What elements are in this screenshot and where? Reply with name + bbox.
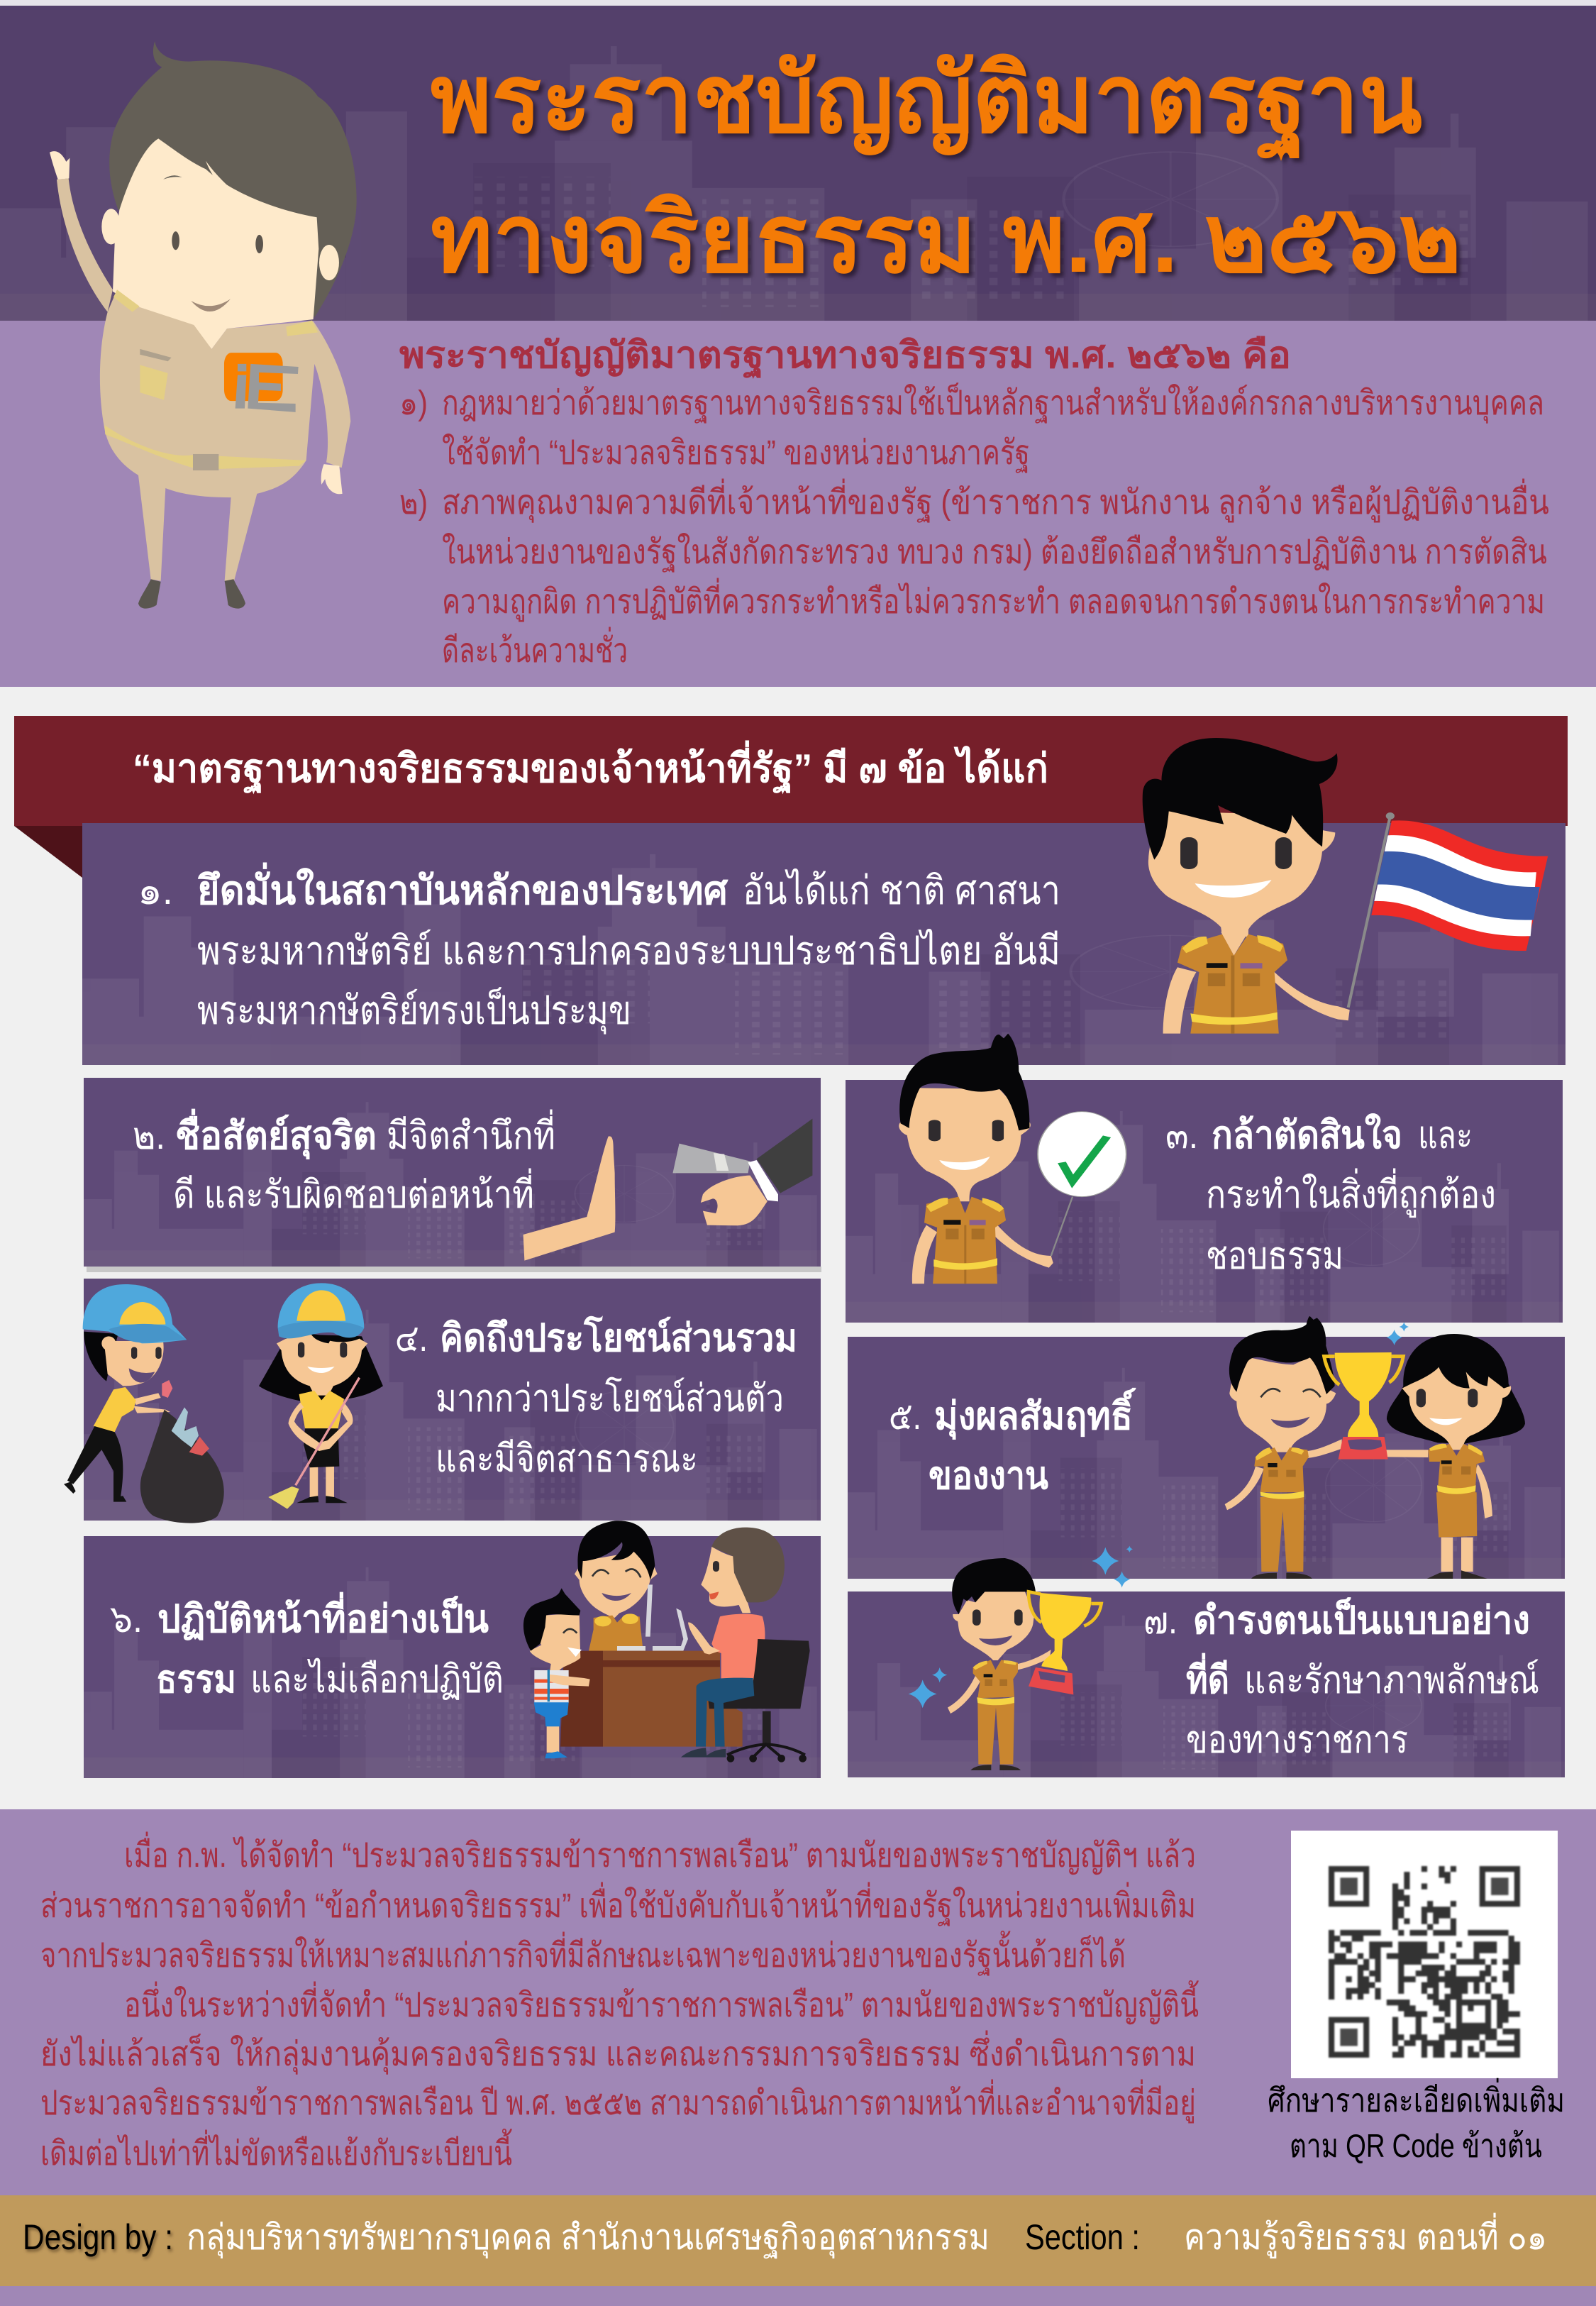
item one: ๑) (399, 385, 428, 422)
panel 2 (84, 1078, 821, 1272)
panel 7 text: ของทางราชการ (1186, 1719, 1408, 1761)
panel 4 text: มากกว่าประโยชน์ส่วนตัว (436, 1377, 784, 1420)
panel 5 text: มุ่งผลสัมฤทธิ์ (934, 1387, 1136, 1440)
item one (399, 382, 1544, 473)
note text block: ยังไม่แล้วเสร็จ ให้กลุ่มงานคุ้มครองจริยธรรม และคณะกรรมการจริยธรรม ซึ่งดำเนินการตาม (40, 2030, 1196, 2075)
panel 6 text (110, 1591, 504, 1701)
panel 5 text: ๕. (889, 1395, 921, 1438)
QR caption: ตาม QR Code ข้างต้น (1290, 2127, 1542, 2164)
panel 1 text: อันได้แก่ ชาติ ศาสนา (743, 868, 1060, 912)
QR code (1291, 1831, 1558, 2078)
note text block: จากประมวลจริยธรรมให้เหมาะสมแก่ภารกิจที่มีลักษณะเฉพาะของหน่วยงานของรัฐนั้นด้วยก็ได้ (40, 1931, 1126, 1975)
panel 7 text: ดำรงตนเป็นแบบอย่าง (1193, 1598, 1530, 1642)
panel 3 text (1165, 1113, 1496, 1277)
item two: ดีละเว้นความชั่ว (442, 627, 628, 670)
illustration: officer serving citizens at desk (523, 1521, 810, 1762)
panel 5 (848, 1316, 1565, 1579)
item two: ๒) (399, 484, 428, 522)
footer bar (0, 2195, 1596, 2286)
panel 6 text: ปฏิบัติหน้าที่อย่างเป็น (157, 1591, 489, 1640)
panel 1 text: พระมหากษัตริย์ทรงเป็นประมุข (197, 986, 631, 1035)
panel 4 text: ๔. (395, 1317, 428, 1359)
panel 3 (846, 1034, 1563, 1323)
intro panel background (0, 321, 1596, 687)
note text block (40, 1831, 1199, 2173)
note text block: ประมวลจริยธรรมข้าราชการพลเรือน ปี พ.ศ. ๒๕๕๒ สามารถดำเนินการตามหน้าที่และอำนาจที่มีอยู่ (40, 2079, 1196, 2124)
title (431, 45, 1461, 292)
item one: ใช้จัดทำ “ประมวลจริยธรรม” ของหน่วยงานภาครัฐ (442, 433, 1030, 473)
panel 2 text: ชื่อสัตย์สุจริต (175, 1108, 377, 1160)
panel 4 text: คิดถึงประโยชน์ส่วนรวม (440, 1315, 797, 1359)
panel 3 text: ๓. (1165, 1114, 1198, 1157)
panel 4 text (395, 1315, 797, 1480)
panel 3 text: กล้าตัดสินใจ (1212, 1113, 1402, 1157)
panel 6 text: และไม่เลือกปฏิบัติ (250, 1657, 504, 1701)
character: two officers holding trophy (1225, 1316, 1525, 1579)
note text block: เมื่อ ก.พ. ได้จัดทำ “ประมวลจริยธรรมข้าราชการพลเรือน” ตามนัยของพระราชบัญญัติฯ แล้ว (124, 1831, 1196, 1875)
character: officer with Thai flag (1143, 738, 1548, 1034)
panel 2 text: ๒. (133, 1115, 165, 1157)
character: woman sweeping (259, 1283, 383, 1509)
panel 3 text: กระทำในสิ่งที่ถูกต้อง (1206, 1168, 1496, 1218)
intro text block (399, 335, 1549, 670)
panel 7 text (1143, 1598, 1539, 1761)
panel 7 text: ที่ดี (1186, 1653, 1229, 1701)
panel 1 text (138, 862, 1060, 1035)
panel 1 text: ยึดมั่นในสถาบันหลักของประเทศ (197, 862, 728, 912)
panel 3 text: ชอบธรรม (1206, 1235, 1343, 1277)
footer text: กลุ่มบริหารทรัพยากรบุคคล สำนักงานเศรษฐกิจอุตสาหกรรม (187, 2217, 990, 2258)
panel 2 text: ดี และรับผิดชอบต่อหน้าที่ (173, 1168, 534, 1216)
panel 6 text: ๖. (110, 1598, 143, 1640)
panel 6 (84, 1521, 821, 1778)
panel 2 text (133, 1108, 555, 1216)
bottom information panel (0, 1809, 1596, 2306)
panel 1 text: พระมหากษัตริย์ และการปกครองระบบประชาธิปไตย อันมี (197, 928, 1060, 973)
note text block: ส่วนราชการอาจจัดทำ “ข้อกำหนดจริยธรรม” เพื่อใช้บังคับกับเจ้าหน้าที่ของรัฐในหน่วยงานเพิ่มเติม (40, 1882, 1196, 1926)
section ribbon (14, 716, 1568, 878)
footer text: Section : (1025, 2217, 1140, 2257)
panel 1 text: ๑. (138, 868, 173, 912)
panel 4 (64, 1279, 821, 1523)
intro heading: พระราชบัญญัติมาตรฐานทางจริยธรรม พ.ศ. ๒๕๖๒ คือ (399, 335, 1291, 379)
panel 7 text: ๗. (1143, 1599, 1177, 1642)
character: man collecting garbage (64, 1284, 224, 1523)
footer text (23, 2213, 1547, 2258)
character: officer raising trophy (909, 1546, 1133, 1770)
title: ทางจริยธรรม พ.ศ. ๒๕๖๒ (431, 185, 1461, 292)
panel 5 text (889, 1387, 1136, 1497)
panel 4 text: และมีจิตสาธารณะ (436, 1438, 698, 1480)
note text block: เดิมต่อไปเท่าที่ไม่ขัดหรือแย้งกับระเบียบนี้ (40, 2129, 512, 2173)
item two (399, 478, 1549, 670)
character: waving officer (50, 41, 357, 609)
header banner (0, 0, 1596, 321)
panel 5 text: ของงาน (929, 1455, 1048, 1497)
character: officer with check mark balloon (899, 1034, 1126, 1284)
note text block: อนึ่งในระหว่างที่จัดทำ “ประมวลจริยธรรมข้าราชการพลเรือน” ตามนัยของพระราชบัญญัตินี้ (124, 1980, 1199, 2024)
footer text: ความรู้จริยธรรม ตอนที่ ๐๑ (1184, 2213, 1547, 2258)
footer text: Design by : (23, 2217, 173, 2257)
icon: hand refusing bribe (523, 1119, 812, 1261)
panel 7 (848, 1546, 1565, 1777)
title: พระราชบัญญัติมาตรฐาน (431, 45, 1422, 162)
panel 1 (82, 738, 1565, 1065)
panel 7 text: และรักษาภาพลักษณ์ (1244, 1659, 1539, 1701)
panel 2 text: มีจิตสำนึกที่ (387, 1109, 555, 1157)
QR caption (1268, 2078, 1565, 2164)
panel 3 text: และ (1418, 1114, 1473, 1157)
ribbon heading: “มาตรฐานทางจริยธรรมของเจ้าหน้าที่รัฐ” มี ๗ ข้อ ได้แก่ (133, 740, 1048, 794)
panel 6 text: ธรรม (156, 1658, 236, 1701)
